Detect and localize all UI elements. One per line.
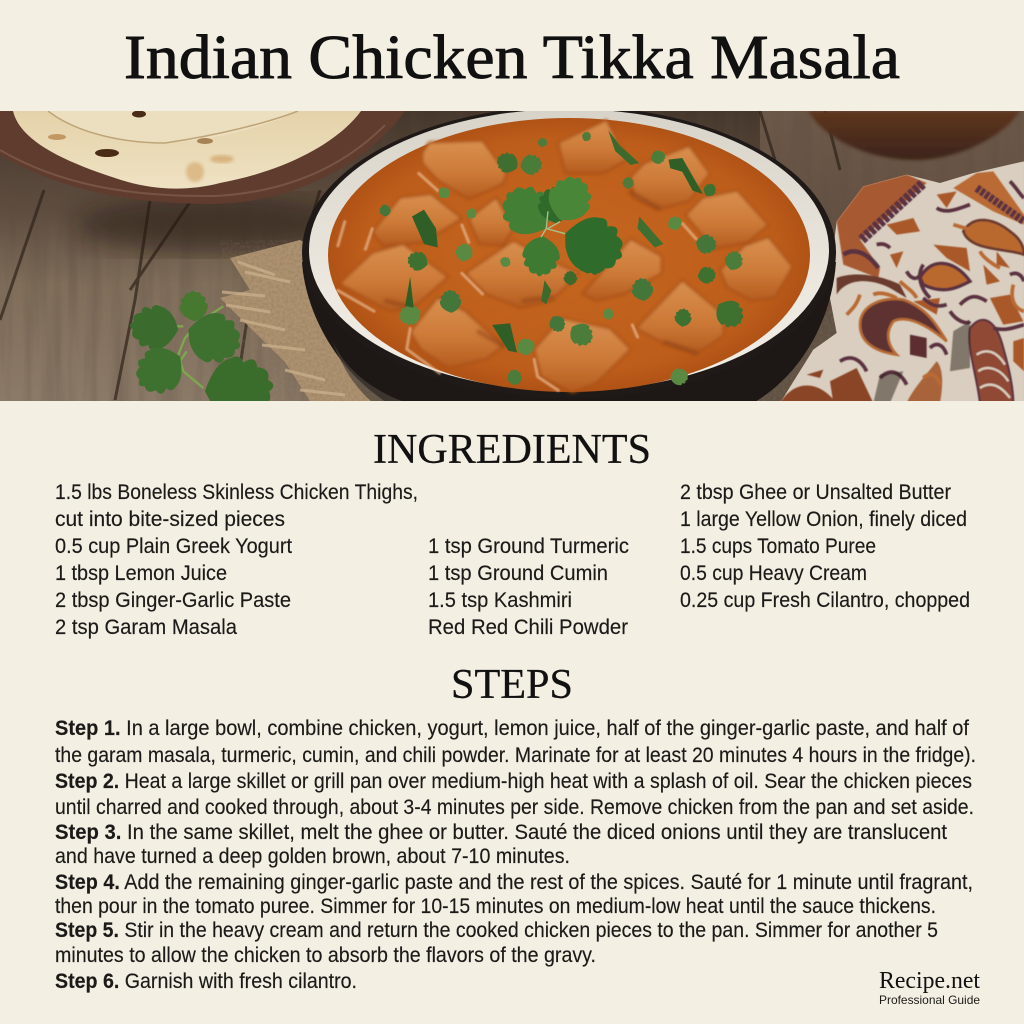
ingredients column 1: cut into bite-sized pieces bbox=[55, 508, 285, 531]
chicken pieces bbox=[340, 120, 792, 392]
central cilantro garnish bbox=[502, 176, 623, 276]
step 1: Step 1. In a large bowl, combine chicken, yogurt, lemon juice, half of the ginger-garlic paste, and half of bbox=[55, 717, 969, 740]
step 5: Step 5. Stir in the heavy cream and return the cooked chicken pieces to the pan. Simmer for another 5 bbox=[55, 919, 938, 942]
brand footer: Recipe.net bbox=[879, 968, 980, 994]
ingredients column 1: 1.5 lbs Boneless Skinless Chicken Thighs, bbox=[55, 481, 418, 504]
ingredients column 2: 1 tsp Ground Cumin bbox=[428, 562, 608, 585]
ingredients column 3: 2 tbsp Ghee or Unsalted Butter bbox=[680, 481, 951, 504]
ingredients column 1 bbox=[55, 481, 418, 639]
title: Indian Chicken Tikka Masala bbox=[124, 24, 900, 92]
brand footer bbox=[879, 968, 980, 1007]
step 1 bbox=[55, 717, 976, 767]
hero photo: chicken tikka masala on a wooden table bbox=[0, 106, 1024, 423]
step 3: and have turned a deep golden brown, about 7-10 minutes. bbox=[55, 845, 570, 868]
ingredients column 3: 1.5 cups Tomato Puree bbox=[680, 535, 876, 558]
ingredients column 1: 1 tbsp Lemon Juice bbox=[55, 562, 227, 585]
step 5: minutes to allow the chicken to absorb the flavors of the gravy. bbox=[55, 944, 596, 967]
step 4: then pour in the tomato puree. Simmer for 10-15 minutes on medium-low heat until the sauce thickens. bbox=[55, 895, 936, 918]
chicken pieces and cilantro bbox=[338, 120, 792, 392]
ingredients column 2: 1 tsp Ground Turmeric bbox=[428, 535, 629, 558]
naan bread on plate bbox=[0, 110, 405, 204]
masala sauce bbox=[328, 118, 810, 392]
burlap mat bbox=[220, 240, 850, 401]
ingredients column 2: Red Red Chili Powder bbox=[428, 616, 628, 639]
darker sauce shading bbox=[386, 192, 696, 353]
brand footer: Professional Guide bbox=[879, 993, 980, 1007]
wooden table bbox=[0, 111, 1024, 401]
step 2: until charred and cooked through, about 3-4 minutes per side. Remove chicken from the pan and set aside. bbox=[55, 796, 974, 819]
ingredients column 1: 2 tbsp Ginger-Garlic Paste bbox=[55, 589, 291, 612]
ingredients heading: INGREDIENTS bbox=[373, 427, 651, 473]
step 4 bbox=[55, 871, 973, 918]
wooden bowl, top right bbox=[808, 111, 1020, 160]
step 5 bbox=[55, 919, 938, 967]
step 3 bbox=[55, 821, 947, 868]
patterned textile bbox=[780, 161, 1024, 403]
step 2 bbox=[55, 770, 974, 819]
ingredients column 3: 0.25 cup Fresh Cilantro, chopped bbox=[680, 589, 970, 612]
ingredients column 1: 2 tsp Garam Masala bbox=[55, 616, 237, 639]
serving bowl bbox=[302, 106, 836, 410]
ingredients column 3: 1 large Yellow Onion, finely diced bbox=[680, 508, 967, 531]
cream highlights bbox=[338, 173, 696, 390]
ingredients column 1: 0.5 cup Plain Greek Yogurt bbox=[55, 535, 292, 558]
step 3: Step 3. In the same skillet, melt the ghee or butter. Sauté the diced onions until they are translucent bbox=[55, 821, 947, 844]
ingredients column 3: 0.5 cup Heavy Cream bbox=[680, 562, 867, 585]
steps heading: STEPS bbox=[451, 662, 573, 708]
step 4: Step 4. Add the remaining ginger-garlic paste and the rest of the spices. Sauté for 1 minute until fragrant, bbox=[55, 871, 973, 894]
ingredients column 2 bbox=[428, 535, 629, 639]
ingredients column 2: 1.5 tsp Kashmiri bbox=[428, 589, 572, 612]
step 1: the garam masala, turmeric, cumin, and chili powder. Marinate for at least 20 minutes 4 hours in the fridge). bbox=[55, 744, 976, 767]
ingredients column 3 bbox=[680, 481, 970, 612]
scattered cilantro flecks bbox=[378, 130, 750, 387]
step 6: Step 6. Garnish with fresh cilantro. bbox=[55, 970, 357, 993]
steps list bbox=[55, 717, 976, 993]
step 2: Step 2. Heat a large skillet or grill pan over medium-high heat with a splash of oil. Sear the chicken pieces bbox=[55, 770, 972, 793]
cilantro sprig on table bbox=[130, 290, 274, 401]
